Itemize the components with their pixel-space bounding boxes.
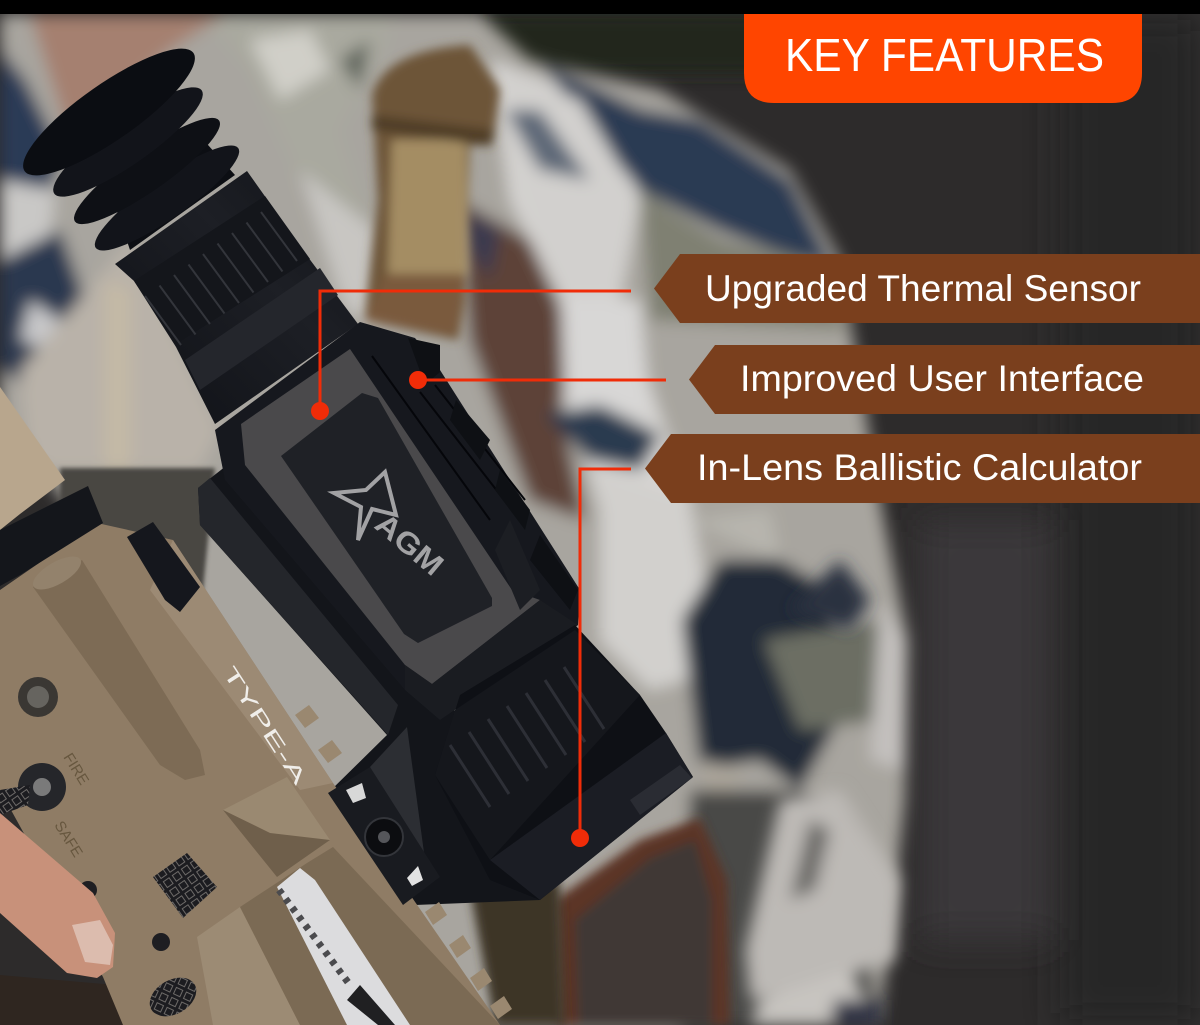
forward assist and controls [18, 677, 58, 717]
left dark area behind rifle [60, 468, 215, 620]
connector: user interface [409, 371, 666, 389]
rail teeth [295, 705, 512, 1019]
charging pin [33, 560, 205, 780]
ejection port [197, 907, 300, 1025]
rifle [0, 387, 512, 1025]
shirt: camouflage [0, 14, 908, 1025]
main body [215, 322, 580, 720]
heading: Key Features [744, 14, 1142, 103]
connector: thermal sensor [311, 291, 631, 420]
logo plate [281, 393, 492, 643]
top bar [0, 0, 1200, 14]
rifle: FIRE [60, 750, 92, 788]
mount blocks [370, 727, 425, 880]
charging handle [127, 522, 200, 612]
rear tube [115, 171, 358, 424]
label: In-Lens Ballistic Calculator: In-Lens Ballistic Calculator [697, 447, 1142, 488]
objective lens [435, 625, 693, 900]
label: Improved User Interface: Improved User Interface [740, 358, 1144, 399]
connector: ballistic calculator [571, 469, 631, 847]
scope [9, 30, 693, 905]
mount rail [198, 455, 540, 905]
scope logo [334, 472, 449, 582]
pouch [555, 818, 730, 1025]
label: In-Lens Ballistic Calculator [645, 434, 1200, 503]
scope logo: AGM [369, 507, 449, 582]
heading: Key Features: KEY FEATURES [785, 29, 1104, 81]
label: Improved User Interface [689, 345, 1200, 414]
optic tube on rifle [0, 387, 65, 530]
shoulder strap [365, 45, 500, 340]
eyecup [9, 30, 250, 264]
rifle markings: TYPE-A [218, 663, 311, 790]
label: Upgraded Thermal Sensor: Upgraded Thermal Sensor [705, 268, 1141, 309]
rifle: SAFE [51, 818, 86, 860]
side buttons [408, 338, 578, 610]
label: Upgraded Thermal Sensor [654, 254, 1200, 323]
hand [0, 813, 115, 978]
